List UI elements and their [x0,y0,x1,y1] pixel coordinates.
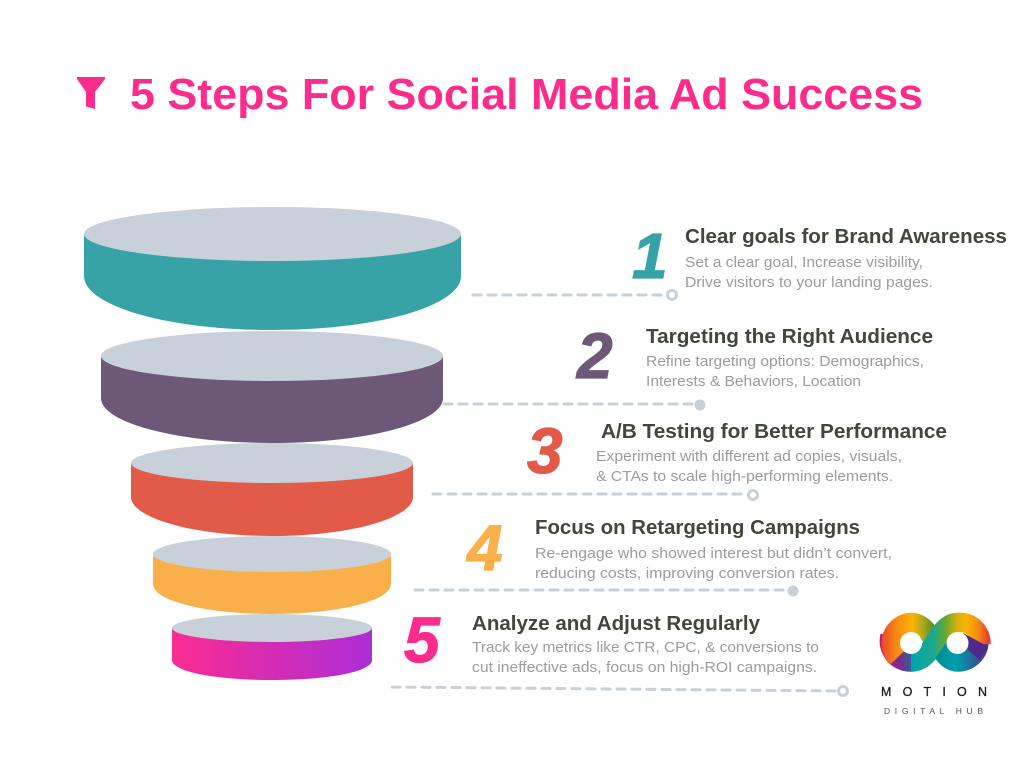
logo tagline: DIGITAL HUB [884,706,983,716]
step 5 description: Track key metrics like CTR, CPC, & conversions to [472,640,819,656]
funnel layer 2 [101,331,443,443]
step 4 [415,512,892,596]
step 1 description: Drive visitors to your landing pages. [685,275,933,291]
step 4 description: reducing costs, improving conversion rates. [535,566,839,582]
number 5: 5 [404,604,441,676]
step 1 heading: Clear goals for Brand Awareness [685,225,1007,248]
title text: 5 Steps For Social Media Ad Success [130,70,923,119]
connector 1 [473,290,676,300]
step 2 description: Interests & Behaviors, Location [646,374,861,390]
logo [881,622,987,716]
step 1 [473,220,1007,300]
funnel layer 5 [172,614,372,680]
connector 3 [433,490,758,500]
step 5 description: cut ineffective ads, focus on high-ROI campaigns. [472,660,817,676]
step 2 [444,320,933,410]
number 4: 4 [465,512,503,584]
connector 5 [392,686,848,696]
icon: funnel [77,77,105,109]
step 5 [392,604,848,696]
step 2 heading: Targeting the Right Audience [646,325,933,348]
step 5 heading: Analyze and Adjust Regularly [472,612,761,635]
connector 4 [415,586,798,596]
connector 2 [444,400,706,410]
number 3: 3 [527,415,563,487]
step 3 description: & CTAs to scale high-performing elements. [596,469,893,485]
funnel layer 3 [131,443,413,536]
number 2: 2 [576,320,613,392]
step 3 [433,415,947,500]
title [77,70,923,119]
funnel layer 1 [84,207,461,330]
logo wordmark: MOTION [881,685,987,699]
step 1 description: Set a clear goal, Increase visibility, [685,255,923,271]
step 2 description: Refine targeting options: Demographics, [646,354,924,370]
number 1: 1 [632,220,668,292]
step 3 heading: A/B Testing for Better Performance [601,420,947,443]
step 3 description: Experiment with different ad copies, visuals, [596,449,902,465]
step 4 heading: Focus on Retargeting Campaigns [535,516,860,539]
step 4 description: Re-engage who showed interest but didn’t convert, [535,546,892,562]
funnel layer 4 [153,536,391,614]
icon: infinity symbol [889,622,987,662]
funnel chart [84,207,461,680]
